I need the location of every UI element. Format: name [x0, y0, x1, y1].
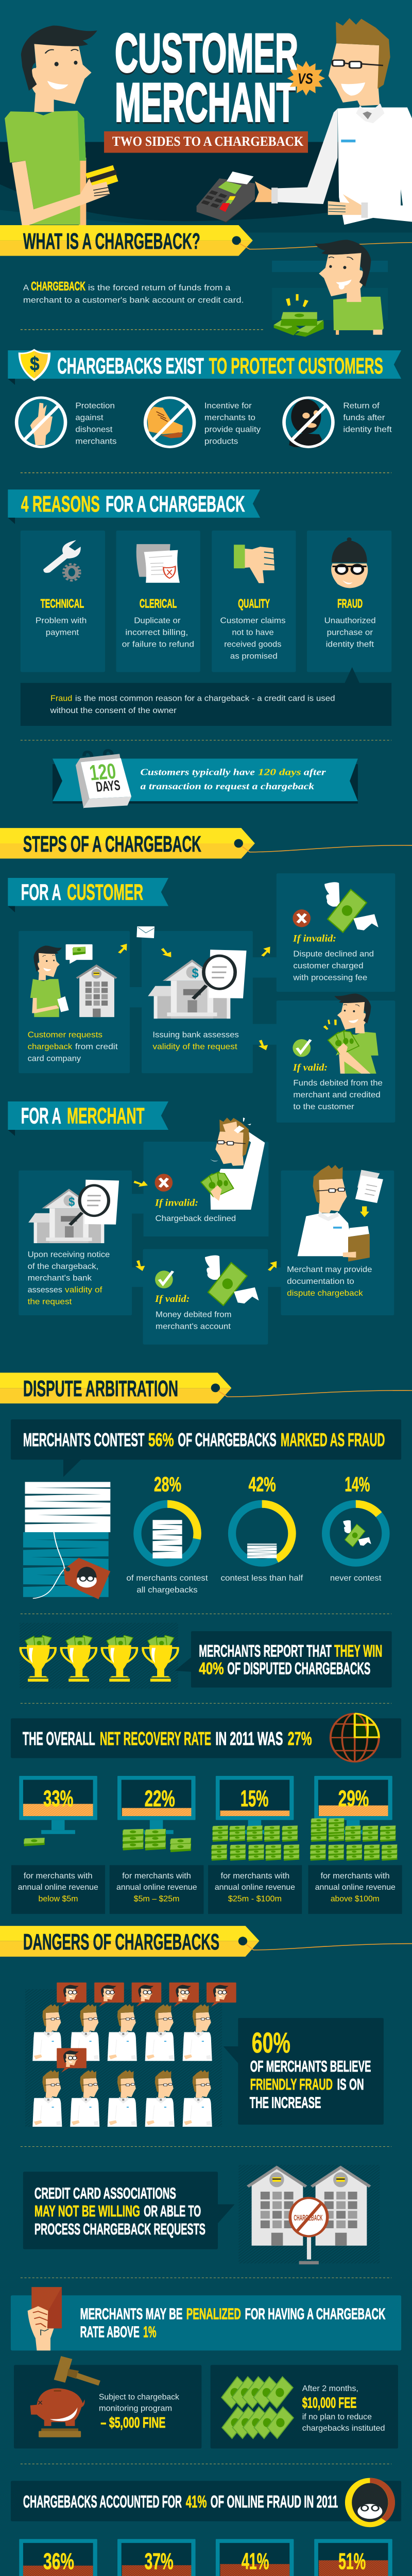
callout: card associations: CREDIT CARD ASSOCIATIONS — [35, 2184, 176, 2202]
callout: 60% friendly fraud: 60% — [252, 2027, 290, 2059]
panel: clerical: CLERICAL — [140, 597, 177, 611]
revenue label: $5m-$25m: annual online revenue — [116, 1883, 197, 1892]
callout: merchants contest 56%: OF CHARGEBACKS — [178, 1430, 277, 1450]
monitor: 37%: 37% — [145, 2549, 174, 2574]
monitor: 51% — [310, 2539, 397, 2576]
panel: $5,000 fine: – $5,000 FINE — [100, 2415, 165, 2431]
stat: 14% never contest: never contest — [330, 1574, 382, 1583]
text: chargeback definition: CHARGEBACK — [31, 279, 85, 293]
panel: merchant may dispute: Merchant may provide — [287, 1265, 372, 1274]
text: identity theft: funds after — [343, 413, 385, 422]
banner: net recovery rate: IN 2011 WAS — [215, 1728, 283, 1749]
divider — [21, 2146, 391, 2147]
stat: 28% contest all: 28% — [154, 1473, 181, 1496]
panel: if invalid (merchant): If invalid: — [154, 1197, 198, 1208]
illustration: customer holding card — [5, 26, 118, 228]
arrows: customer steps — [118, 944, 271, 1050]
stat: 42% contest less than half — [221, 1473, 303, 1583]
panel: customer requests chargeback: chargeback — [28, 1042, 73, 1052]
ribbon: for a customer: FOR A — [21, 879, 61, 905]
panel: fraud: Unauthorized — [324, 616, 376, 625]
no-sign: thief — [284, 398, 333, 447]
panel: if invalid (customer): If invalid: — [293, 933, 336, 944]
subtitle — [104, 131, 308, 153]
callout: fraud most common: without the consent of the owner — [50, 706, 177, 715]
panel: quality: received goods — [224, 640, 281, 649]
banner: 41% of online fraud: 41% — [186, 2492, 207, 2512]
panel: if invalid (merchant) — [144, 1117, 268, 1236]
callout: 60% friendly fraud: THE INCREASE — [250, 2093, 321, 2111]
stat: 28% contest all — [126, 1473, 208, 1595]
panel: customer requests chargeback — [19, 931, 130, 1073]
merchant connectors — [131, 1194, 282, 1287]
subtitle: TWO SIDES TO A CHARGEBACK — [112, 134, 303, 149]
ribbon: for a merchant — [8, 1101, 168, 1136]
divider — [21, 1613, 391, 1614]
banner: 41% of online fraud — [11, 2481, 401, 2521]
section tag: dispute arbitration: DISPUTE ARBITRATION — [23, 1376, 178, 1401]
title — [115, 22, 298, 135]
callout: card associations: MAY NOT BE WILLING — [35, 2202, 140, 2220]
revenue label: above $100m: for merchants with — [320, 1871, 390, 1880]
panel: if valid (customer) — [277, 993, 395, 1123]
panel: issuing bank assesses: Issuing bank assesses — [152, 1030, 239, 1040]
ribbon: chargebacks exist to protect customers — [8, 349, 401, 385]
monitor: 29%: 29% — [338, 1786, 369, 1811]
grid: merchants with friendly fraud bubbles — [25, 1982, 236, 2127]
text: chargeback definition: A — [23, 283, 29, 293]
panel: quality: not to have — [232, 628, 274, 637]
panel: if valid (customer): Funds debited from the — [293, 1078, 383, 1088]
panel: quality — [212, 531, 296, 672]
icon: 120 days calendar: DAYS — [95, 777, 121, 795]
stat: 42% contest less than half: 42% — [249, 1473, 276, 1496]
ribbon: 120 days — [53, 758, 358, 804]
illustration: banks with no chargeback sign: CHARGEBACK — [294, 2214, 323, 2223]
panel: technical — [21, 531, 105, 672]
panel: quality: QUALITY — [238, 597, 270, 611]
banner: penalized above 1%: 1% — [143, 2323, 157, 2341]
text: dishonest merchants: dishonest — [75, 425, 113, 434]
panel: customer requests chargeback: card company — [28, 1054, 81, 1063]
divider — [21, 329, 264, 331]
panel: customer requests chargeback: from credit — [75, 1042, 118, 1052]
text: quality products: products — [204, 437, 238, 446]
panel: merchant's bank assesses: $ — [68, 1195, 75, 1208]
callout: merchants contest 56% — [11, 1419, 401, 1477]
text: chargeback definition — [23, 279, 244, 305]
ribbon: chargebacks exist to protect customers: CHARGEBACKS EXIST — [57, 353, 204, 378]
callout: fraud most common — [21, 667, 391, 726]
monitor: 15%: 15% — [241, 1786, 268, 1811]
text: dishonest merchants — [75, 401, 117, 446]
panel: if invalid (merchant): Chargeback declined — [156, 1214, 236, 1223]
text: identity theft: Return of — [343, 401, 380, 411]
panel: clerical: Duplicate or — [134, 616, 181, 625]
divider — [21, 2277, 391, 2278]
panel: issuing bank assesses: validity of the request — [152, 1042, 237, 1052]
text: identity theft — [343, 401, 392, 434]
callout: card associations: PROCESS CHARGEBACK REQUESTS — [35, 2220, 205, 2238]
divider — [21, 739, 391, 741]
monitor: 41%: 41% — [242, 2549, 269, 2574]
ribbon: for a merchant: FOR A — [21, 1103, 61, 1128]
text: quality products — [204, 401, 261, 446]
banner: 41% of online fraud: CHARGEBACKS ACCOUNTED FOR — [23, 2492, 182, 2512]
revenue label: $25m-$100m: annual online revenue — [215, 1883, 295, 1892]
panel: if valid (customer): merchant and credited — [293, 1090, 381, 1099]
panel: quality: Customer claims — [220, 616, 286, 625]
panel: if invalid (customer) — [277, 873, 395, 992]
panel: merchant's bank assesses: Upon receiving notice — [28, 1250, 110, 1259]
revenue label: below $5m: annual online revenue — [18, 1883, 98, 1892]
ribbon: 4 reasons: 4 REASONS — [21, 491, 100, 516]
monitor: 15% — [211, 1776, 299, 1861]
panel: clerical — [116, 531, 200, 672]
text: quality products: Incentive for — [204, 401, 252, 411]
banner: net recovery rate — [11, 1718, 401, 1758]
header background — [0, 0, 412, 233]
icon: globe 27% — [331, 1714, 379, 1761]
panel: merchant may dispute: dispute chargeback — [287, 1289, 363, 1298]
text: identity theft: identity theft — [343, 425, 392, 434]
panel: fraud: purchase or — [327, 628, 373, 637]
revenue label: above $100m — [308, 1865, 402, 1914]
monitor: 36%: 36% — [43, 2549, 74, 2574]
panel: fraud: FRAUD — [337, 597, 363, 611]
banner: net recovery rate: 27% — [288, 1728, 312, 1749]
monitor: 22%: 22% — [145, 1786, 175, 1811]
panel: merchant's bank assesses: the request — [28, 1297, 72, 1307]
illustration: banks with no chargeback sign — [238, 2165, 380, 2264]
callout: card associations: OR ABLE TO — [144, 2202, 201, 2220]
illustration: card terminal — [197, 172, 255, 223]
ribbon: 120 days: 120 days — [258, 767, 301, 777]
ribbon: 120 days: Customers typically have — [140, 767, 255, 777]
illustration: surprised customer with cash — [272, 240, 388, 337]
panel: technical: Problem with — [36, 616, 87, 625]
banner: penalized above 1%: RATE ABOVE — [80, 2323, 140, 2341]
divider — [21, 1703, 391, 1704]
revenue label: $5m-$25m: for merchants with — [122, 1871, 191, 1880]
panel: issuing bank assesses — [142, 931, 253, 1073]
stat: 42% contest less than half: contest less than half — [221, 1574, 303, 1583]
ribbon: for a customer — [8, 878, 168, 912]
stat: 14% never contest — [326, 1473, 386, 1583]
monitor: 51%: 51% — [338, 2549, 366, 2574]
panel: customer requests chargeback: Customer requests — [28, 1030, 102, 1040]
stat: 14% never contest: 14% — [345, 1473, 370, 1496]
panel: merchant's bank assesses: assesses — [28, 1285, 62, 1295]
panel: technical: payment — [46, 628, 79, 637]
panel: merchant's bank assesses: merchant's bank — [28, 1274, 92, 1283]
ribbon: for a merchant: MERCHANT — [67, 1103, 145, 1128]
monitor: 33% — [19, 1776, 97, 1846]
ribbon: chargebacks exist to protect customers: $ — [30, 353, 40, 375]
no-sign: boot — [145, 398, 194, 447]
revenue label: $5m-$25m: $5m – $25m — [134, 1894, 179, 1904]
callout: they win 40% — [175, 1631, 392, 1688]
callout: they win 40%: 40% — [199, 1659, 224, 1678]
panel: merchant may dispute: documentation to — [287, 1277, 354, 1286]
stat: 28% contest all: of merchants contest — [126, 1574, 208, 1583]
panel: if valid (merchant): If valid: — [154, 1293, 190, 1304]
callout: fraud most common: is the most common reason for a chargeback - a credit card is used — [75, 694, 335, 703]
callout: merchants contest 56%: MERCHANTS CONTEST — [23, 1430, 145, 1450]
panel: fraud — [307, 531, 391, 672]
icon: envelope — [136, 926, 154, 938]
illustration: shredded chargebacks with fraud tag — [23, 1482, 110, 1599]
text: dishonest merchants: merchants — [75, 437, 117, 446]
stat: 28% contest all: all chargebacks — [136, 1585, 198, 1595]
banner: penalized above 1%: MERCHANTS MAY BE — [80, 2305, 183, 2323]
callout: merchants contest 56%: 56% — [148, 1430, 174, 1450]
section tag: dispute arbitration — [0, 1372, 412, 1403]
banner: penalized above 1% — [11, 2287, 401, 2350]
callout: card associations — [23, 2172, 235, 2249]
panel: $10,000 fee: if no plan to reduce — [302, 2412, 372, 2421]
revenue label: $25m-$100m: for merchants with — [221, 1871, 289, 1880]
monitor: 33%: 33% — [43, 1786, 73, 1811]
panel: $10,000 fee — [211, 2365, 398, 2449]
trophies — [20, 1623, 178, 1688]
banner: net recovery rate: THE OVERALL — [23, 1728, 95, 1749]
panel: issuing bank assesses: $ — [192, 966, 199, 981]
monitor: 41% — [211, 2539, 299, 2576]
revenue label: $25m-$100m — [208, 1865, 302, 1914]
banner: net recovery rate: NET RECOVERY RATE — [100, 1728, 211, 1749]
vs badge: VS — [298, 71, 313, 87]
text: quality products: provide quality — [204, 425, 261, 434]
panel: if valid (merchant): merchant's account — [156, 1322, 231, 1331]
icon: thief ring 41% — [349, 2481, 391, 2524]
panel: if valid (customer): to the customer — [293, 1102, 354, 1111]
panel: fraud: identity theft — [326, 640, 374, 649]
monitor: 22% — [117, 1776, 196, 1852]
panel: if invalid (customer): Dispute declined and — [293, 950, 374, 959]
monitor: 29% — [310, 1776, 397, 1861]
ribbon: 120 days: after — [304, 767, 326, 777]
monitor: 36% — [19, 2539, 97, 2576]
callout: fraud most common: Fraud — [50, 694, 72, 703]
arrows: merchant steps — [132, 1179, 277, 1271]
revenue label: $5m-$25m — [110, 1865, 203, 1914]
revenue label: below $5m — [11, 1865, 105, 1914]
text: dishonest merchants: Protection — [75, 401, 115, 411]
panel: $10,000 fee: chargebacks instituted — [302, 2424, 385, 2433]
panel: clerical: incorrect billing, — [125, 628, 188, 637]
revenue label: $25m-$100m: $25m - $100m — [228, 1894, 282, 1904]
panel: quality: as promised — [230, 652, 278, 661]
ribbon: 4 reasons — [8, 489, 260, 524]
panel: if invalid (customer): with processing fee — [293, 973, 367, 982]
panel: merchant's bank assesses — [19, 1171, 132, 1315]
callout: 60% friendly fraud: IS ON — [337, 2075, 364, 2093]
icon: 120 days calendar — [76, 750, 131, 808]
text: chargeback definition: merchant to a customer's bank account or credit card. — [23, 296, 244, 305]
panel: if invalid (customer): customer charged — [293, 961, 364, 971]
illustration: merchant at terminal — [255, 18, 412, 225]
vs badge — [287, 61, 325, 96]
ribbon: for a customer: CUSTOMER — [67, 879, 143, 905]
step connectors — [129, 957, 278, 1045]
banner: penalized above 1%: PENALIZED — [186, 2305, 241, 2323]
panel: $10,000 fee: After 2 months, — [302, 2384, 358, 2393]
panel: clerical: or failure to refund — [122, 640, 194, 649]
panel: technical: TECHNICAL — [41, 597, 84, 611]
panel: if valid (customer): If valid: — [293, 1062, 328, 1073]
text: quality products: merchants to — [204, 413, 255, 422]
revenue label: below $5m: for merchants with — [24, 1871, 93, 1880]
divider — [21, 2463, 391, 2464]
callout: 60% friendly fraud — [224, 2018, 384, 2125]
panel: if valid (merchant) — [143, 1249, 268, 1345]
no-sign: crossed fingers — [16, 398, 65, 447]
revenue label: below $5m: below $5m — [38, 1894, 78, 1904]
ribbon: 120 days: a transaction to request a chargeback — [140, 781, 314, 791]
panel: $5,000 fine: Subject to chargeback — [99, 2393, 179, 2402]
monitor: 37% — [117, 2539, 196, 2576]
revenue label: above $100m: above $100m — [331, 1894, 380, 1904]
panel: merchant may dispute — [281, 1165, 394, 1315]
divider — [21, 472, 391, 474]
text: dishonest merchants: against — [75, 413, 104, 422]
text: chargeback definition: is the forced return of funds from a — [88, 283, 231, 293]
icon: 120 days calendar: 120 — [88, 759, 117, 785]
panel: $5,000 fine — [14, 2356, 201, 2449]
panel: if valid (merchant): Money debited from — [156, 1310, 231, 1319]
panel: $5,000 fine: monitoring program — [99, 2404, 172, 2413]
section tag: what is a chargeback: WHAT IS A CHARGEBACK? — [23, 228, 200, 253]
panel: merchant's bank assesses: validity of — [65, 1285, 102, 1295]
panel: merchant's bank assesses: of the chargeback, — [28, 1262, 98, 1271]
